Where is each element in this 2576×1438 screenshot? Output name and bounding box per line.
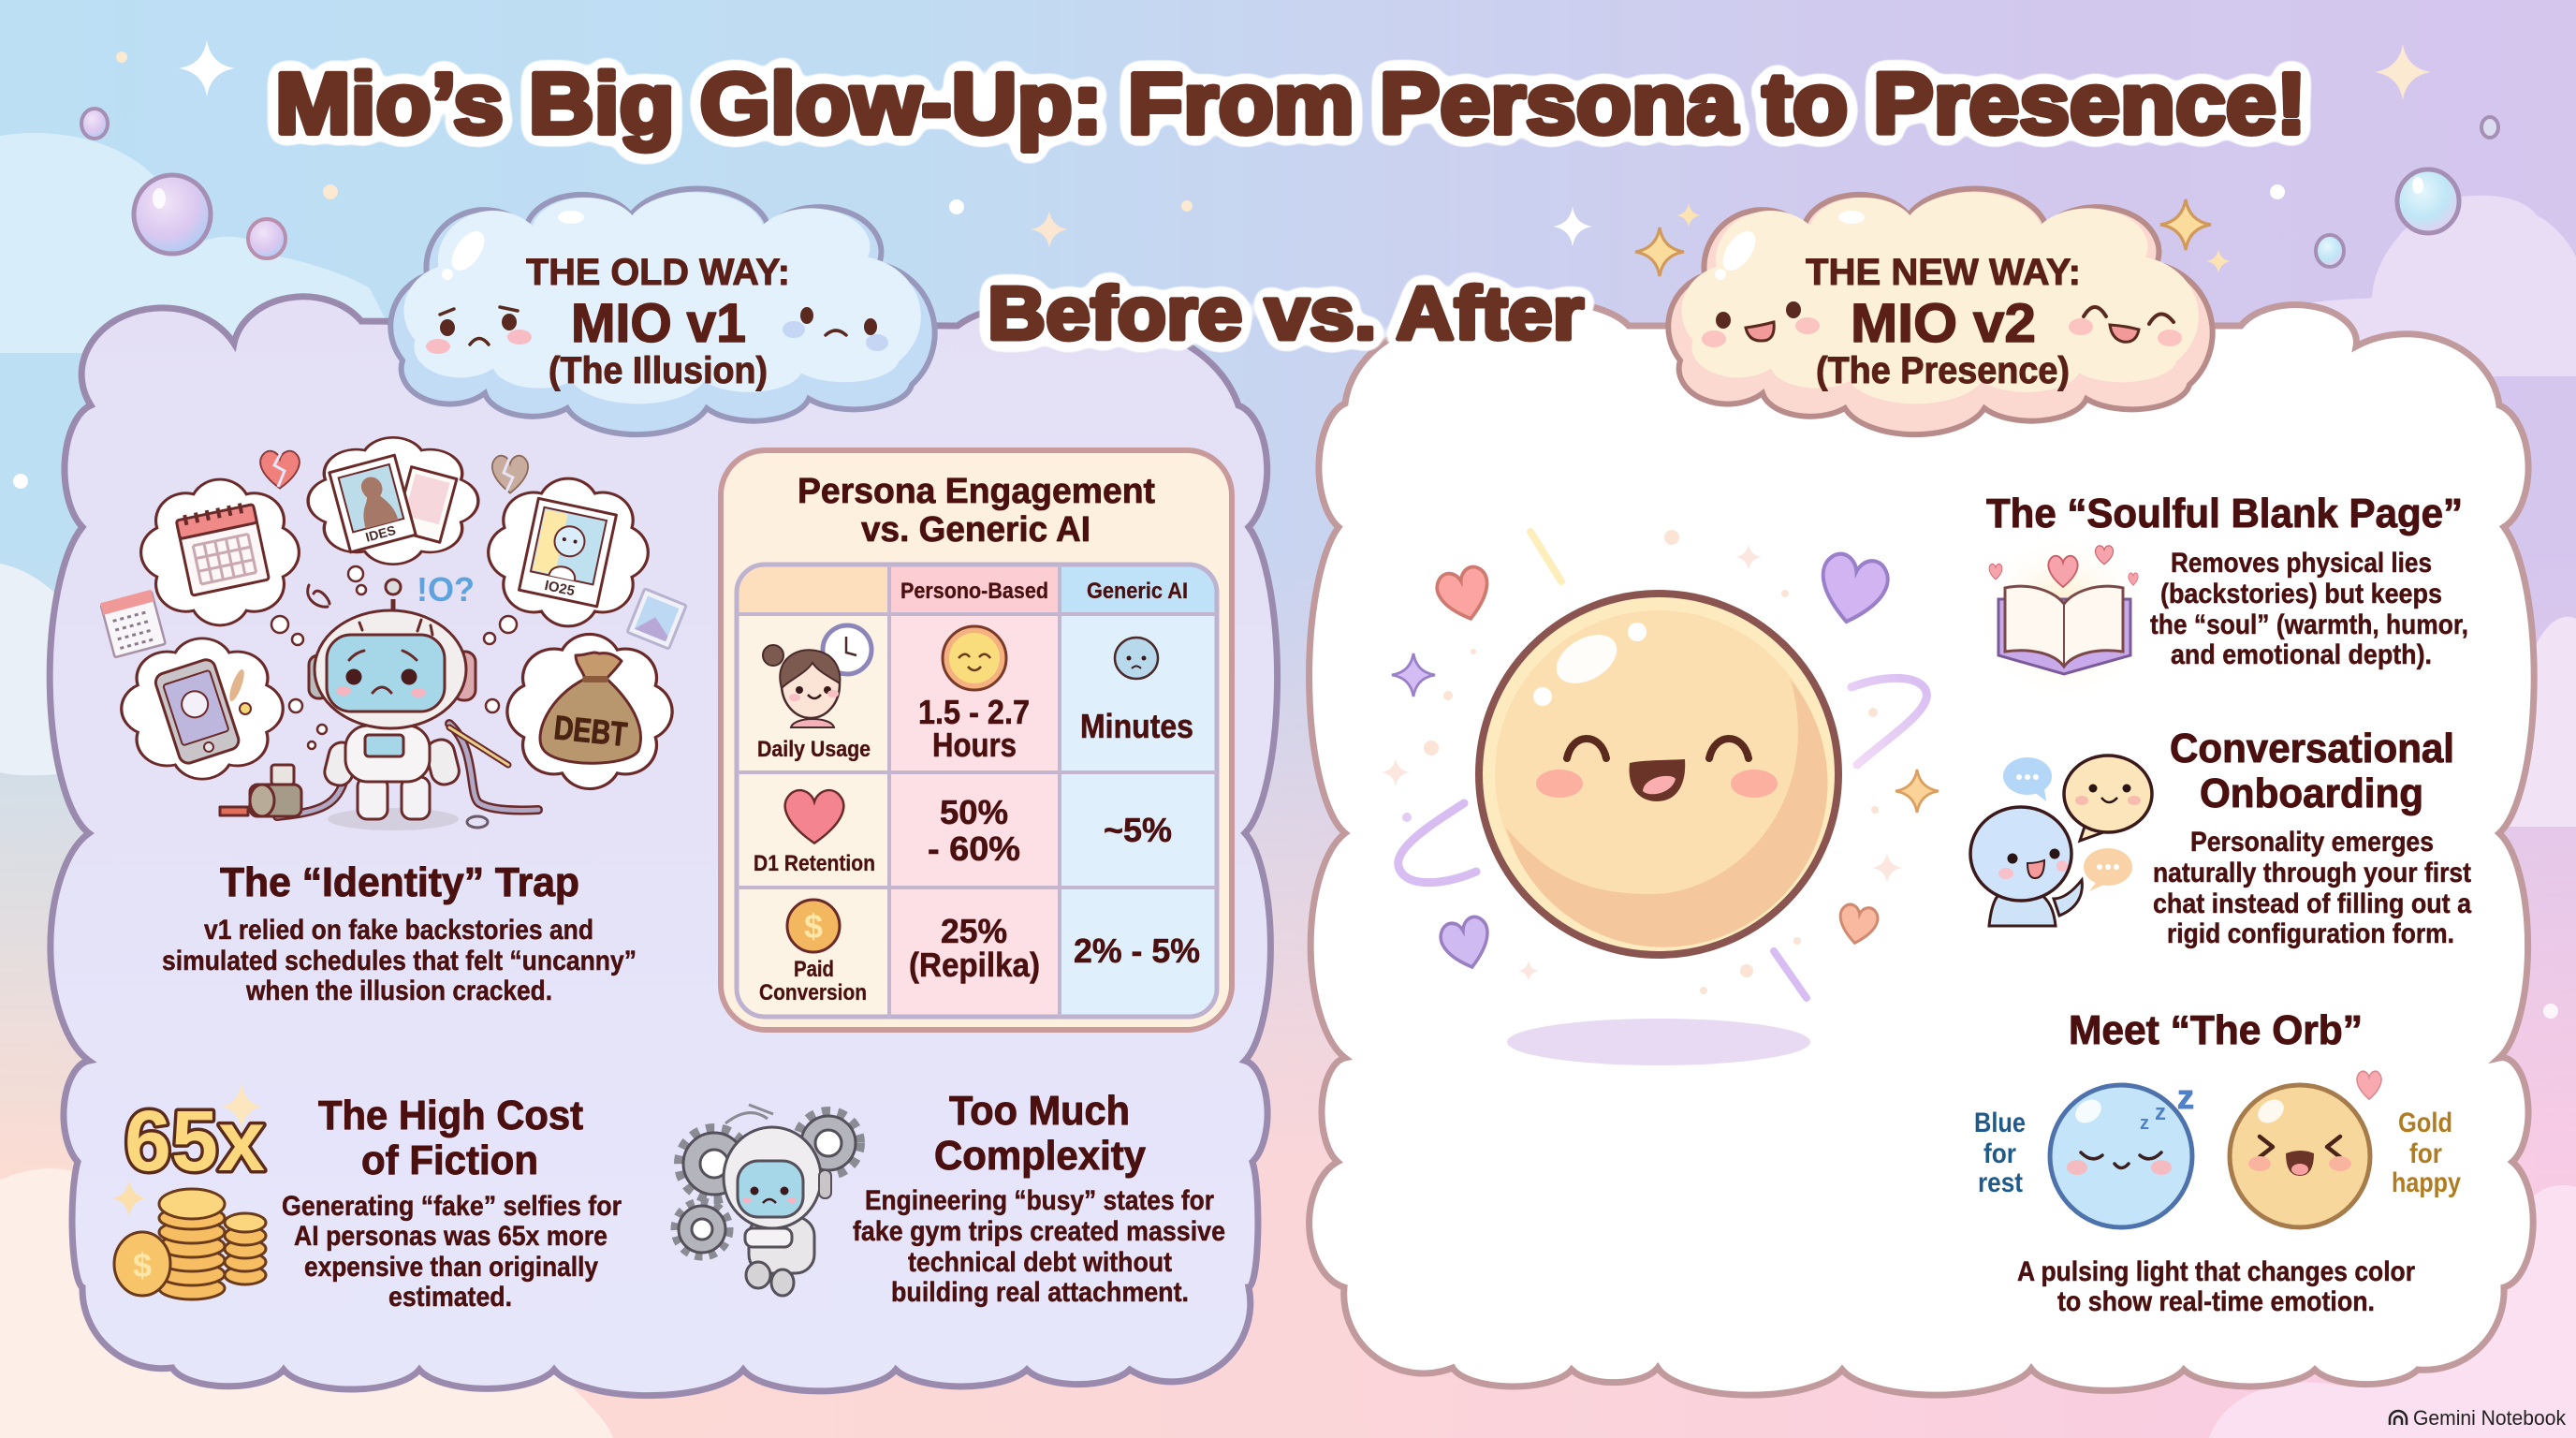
row: D1 retention — [754, 790, 1172, 876]
footer: gemini notebook credit: Gemini Notebook — [2413, 1406, 2567, 1430]
row: daily usage: Daily Usage — [757, 737, 871, 762]
heading: too much complexity: Too Much — [949, 1088, 1130, 1134]
header cloud: old way — [390, 188, 935, 434]
thought: photos: IDES — [364, 522, 397, 545]
text: identity trap body: simulated schedules that felt “uncanny” — [162, 946, 637, 976]
icon: dollar coin: $ — [804, 907, 823, 946]
text: high cost body: Generating “fake” selfies for — [282, 1191, 622, 1222]
heading: identity trap: The “Identity” Trap — [220, 859, 579, 905]
thought: phone — [122, 638, 283, 779]
block: soulful blank page — [1974, 491, 2468, 702]
row: daily usage — [757, 625, 1193, 764]
column headers: Persono-Based — [900, 579, 1048, 604]
icon: heart — [785, 790, 843, 844]
icon: sad orb — [1115, 638, 1158, 679]
text: orb caption: A pulsing light that changes color — [2017, 1256, 2415, 1287]
row: daily usage: Hours — [932, 726, 1017, 764]
orb body — [1479, 594, 1838, 955]
face: happy left — [1702, 301, 1820, 347]
column headers: Generic AI — [1087, 579, 1188, 604]
cloud heading text: (The Presence) — [1816, 350, 2070, 391]
text: onboarding body — [2153, 827, 2471, 949]
text: identity trap body: when the illusion cracked. — [245, 976, 552, 1006]
label: gold for happy: Gold — [2398, 1108, 2452, 1138]
row: paid conversion: (Repilka) — [909, 946, 1040, 984]
face: happy right — [2069, 307, 2182, 346]
label: blue for rest: Blue — [1974, 1108, 2026, 1138]
row: D1 retention: 50% — [940, 793, 1008, 831]
heading: too much complexity: Complexity — [934, 1133, 1146, 1179]
heading: table title: vs. Generic AI — [861, 510, 1090, 550]
cloud heading text: THE NEW WAY: — [1806, 252, 2081, 293]
text: orb caption — [2017, 1256, 2415, 1317]
label: gold for happy — [2392, 1108, 2461, 1198]
text: complexity body: fake gym trips created massive — [853, 1216, 1225, 1247]
column headers — [900, 579, 1188, 604]
row: D1 retention: ~5% — [1104, 811, 1172, 849]
header cloud: new way — [1668, 188, 2213, 434]
cloud heading text: MIO v1 — [571, 293, 746, 354]
text: complexity body — [853, 1185, 1225, 1308]
text: identity trap body — [162, 915, 637, 1006]
row: D1 retention: D1 Retention — [754, 851, 875, 876]
cloud heading text: THE OLD WAY: — [526, 252, 790, 293]
thought: selfie — [489, 478, 648, 626]
row: daily usage: Minutes — [1080, 707, 1193, 745]
icon: chat character — [1970, 756, 2152, 926]
row: paid conversion: 25% — [941, 912, 1007, 950]
label: blue for rest: for — [1983, 1138, 2016, 1169]
row: D1 retention: - 60% — [928, 829, 1020, 868]
row: paid conversion — [759, 900, 1200, 1005]
icon: happy orb — [943, 626, 1006, 690]
text: high cost body: estimated. — [388, 1282, 512, 1313]
heading: high cost of fiction: of Fiction — [361, 1137, 538, 1183]
row: paid conversion: Conversion — [759, 980, 867, 1005]
mini thought bubbles — [271, 566, 517, 749]
heading: high cost of fiction — [318, 1093, 583, 1183]
label: blue for rest — [1974, 1108, 2026, 1198]
text: soulful body: (backstories) but keeps — [2160, 579, 2442, 609]
block: meet the orb — [1974, 1007, 2461, 1317]
icon: blue resting orb: z — [2140, 1113, 2149, 1134]
heading: too much complexity — [934, 1088, 1146, 1179]
row: paid conversion: 2% - 5% — [1074, 932, 1200, 970]
text: onboarding body: chat instead of filling out a — [2153, 888, 2471, 919]
astronaut — [220, 570, 538, 830]
icon: 65x with coins — [112, 1082, 266, 1299]
heading: table title: Persona Engagement — [798, 472, 1155, 511]
icon: gold happy orb — [2230, 1071, 2381, 1227]
text: soulful body — [2150, 548, 2468, 670]
title: Mio’s Big Glow-Up: From Persona to Presence! — [275, 56, 2306, 152]
icon: astronaut with gears — [675, 1105, 860, 1296]
thought: photos — [308, 437, 478, 565]
illustration: big happy orb — [1382, 530, 1939, 1065]
label: gold for happy: happy — [2392, 1167, 2461, 1198]
icon: broken hearts — [260, 451, 528, 493]
astronaut: !O? — [417, 570, 475, 609]
text: high cost body — [282, 1191, 622, 1313]
heading: meet the orb: Meet “The Orb” — [2069, 1007, 2363, 1053]
icon: 65x with coins: 65x — [124, 1093, 265, 1189]
text: onboarding body: Personality emerges — [2190, 827, 2434, 858]
icon: dollar coin — [787, 900, 840, 952]
face: sad left — [426, 307, 532, 354]
icon: 65x with coins: $ — [133, 1246, 152, 1284]
icon: small photo — [627, 589, 686, 649]
cloud heading text: MIO v2 — [1851, 293, 2036, 354]
text: complexity body: technical debt without — [908, 1247, 1172, 1278]
icon: blue resting orb — [2050, 1078, 2194, 1227]
text: onboarding body: rigid configuration form. — [2167, 918, 2454, 949]
face: sad right — [783, 307, 888, 351]
panel: data table — [721, 450, 1232, 1030]
heading: high cost of fiction: The High Cost — [318, 1093, 583, 1138]
row: paid conversion: Paid — [794, 957, 834, 982]
thought: debt: DEBT — [552, 708, 629, 754]
illustration: struggling astronaut and thoughts — [100, 437, 686, 830]
text: soulful body: Removes physical lies — [2171, 548, 2432, 579]
text: soulful body: and emotional depth). — [2171, 639, 2432, 670]
floating hearts and sparkles — [1382, 530, 1939, 998]
text: soulful body: the “soul” (warmth, humor, — [2150, 609, 2468, 640]
heading: conversational onboarding: Conversational — [2170, 726, 2454, 771]
heading: table title — [798, 472, 1155, 550]
icon: small calendar — [100, 590, 166, 657]
heading: conversational onboarding — [2170, 726, 2454, 816]
text: high cost body: AI personas was 65x more — [294, 1221, 607, 1252]
text: onboarding body: naturally through your first — [2153, 858, 2471, 888]
block: conversational onboarding — [1970, 726, 2471, 949]
heading: before vs after: Before vs. After — [988, 271, 1584, 355]
label: gold for happy: for — [2409, 1138, 2442, 1169]
panel: old way — [50, 297, 1278, 1396]
icon: blue resting orb: z — [2155, 1100, 2166, 1125]
heading: conversational onboarding: Onboarding — [2200, 770, 2423, 816]
panel: new way — [1310, 301, 2534, 1395]
text: high cost body: expensive than originally — [304, 1252, 598, 1283]
text: complexity body: building real attachment. — [891, 1277, 1189, 1308]
cloud heading text — [526, 252, 790, 391]
thought: debt — [507, 634, 672, 789]
label: blue for rest: rest — [1978, 1167, 2023, 1198]
text: identity trap body: v1 relied on fake backstories and — [204, 915, 593, 946]
text: complexity body: Engineering “busy” states for — [865, 1185, 1214, 1216]
table grid — [737, 565, 1217, 1017]
cloud heading text — [1806, 252, 2081, 391]
thought: calendar — [141, 479, 299, 625]
thought: selfie: IO25 — [543, 578, 576, 599]
text: orb caption: to show real-time emotion. — [2057, 1286, 2375, 1317]
heading: soulful blank page: The “Soulful Blank Page” — [1986, 491, 2463, 536]
cloud heading text: (The Illusion) — [549, 350, 768, 391]
icon: girl with clock — [763, 625, 871, 727]
decorative bubbles and sparkles — [13, 40, 2558, 1019]
icon: blue resting orb: z — [2177, 1078, 2194, 1116]
icon: open book with hearts — [1974, 534, 2152, 702]
row: daily usage: 1.5 - 2.7 — [918, 693, 1030, 731]
